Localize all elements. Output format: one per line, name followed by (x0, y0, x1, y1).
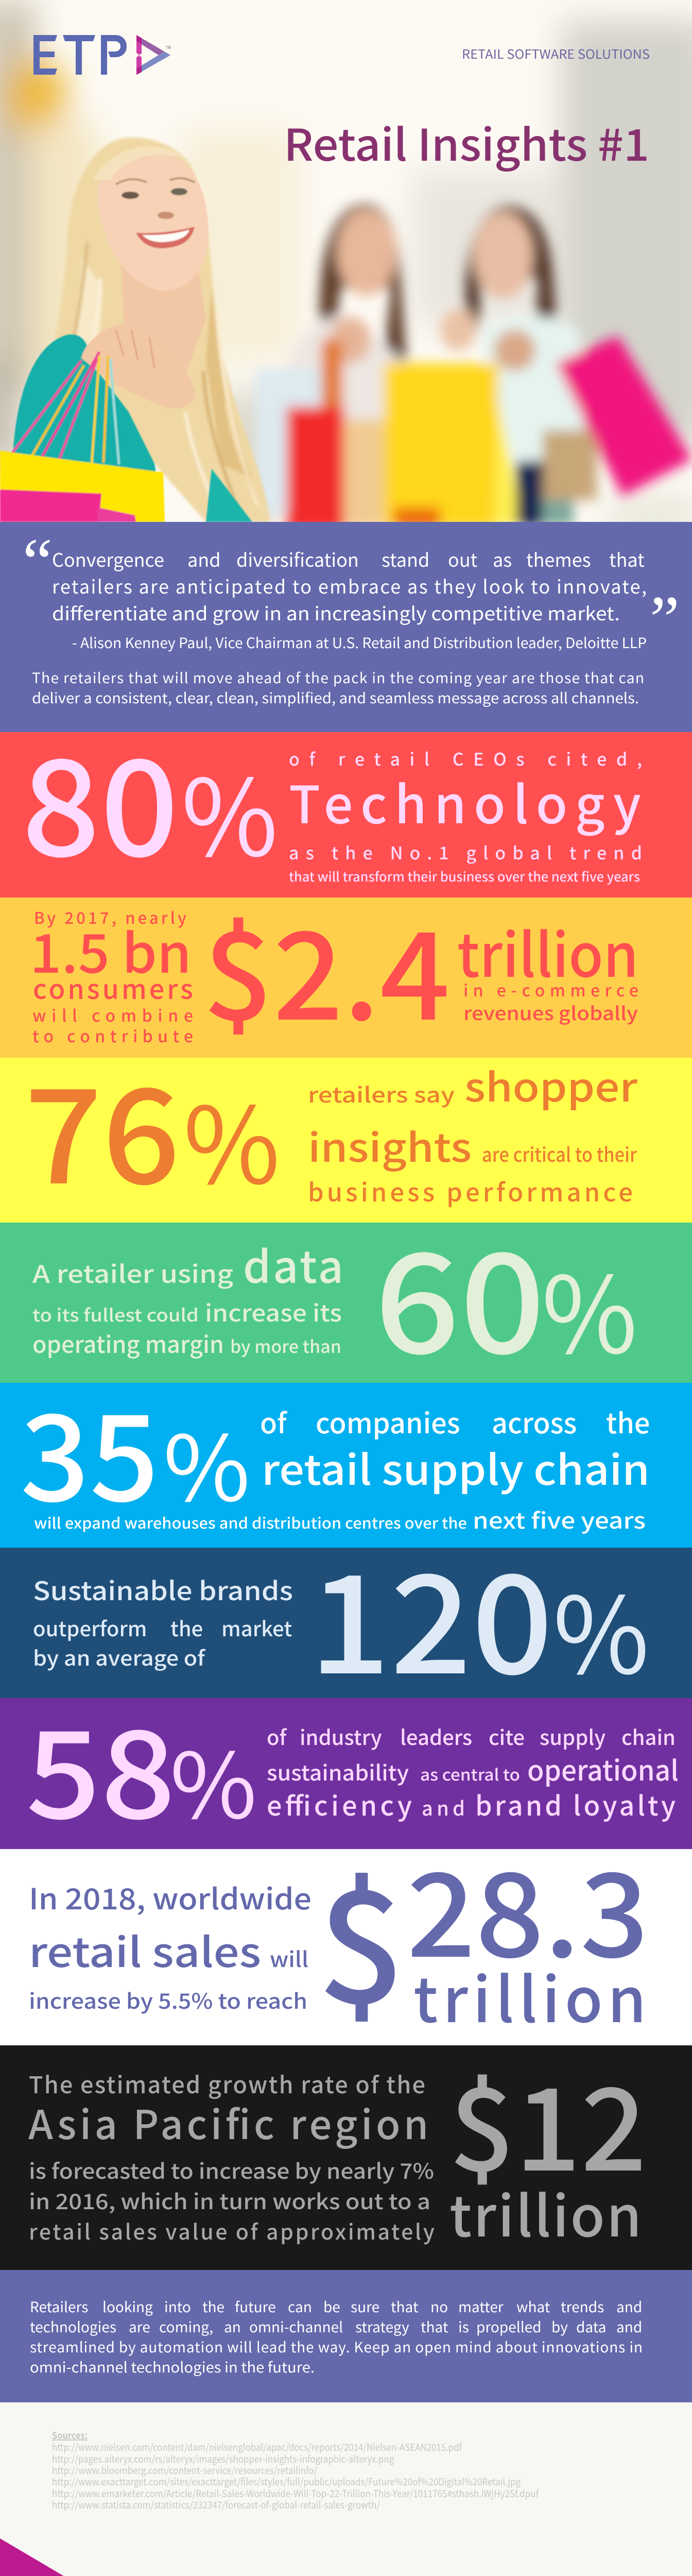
text lines: companies (316, 1401, 460, 1442)
panel: conclusion: propelled (476, 2316, 542, 2337)
conclusion text: be (323, 2296, 340, 2317)
conclusion text: looking (102, 2296, 153, 2317)
hair strands (64, 242, 265, 522)
percent sign: % (542, 1231, 637, 1384)
panel: $2.4 trillion: to contribute (32, 1024, 193, 1047)
sources: http://pages.alteryx.com/rs/alteryx/images/shopper-insights-infographic-alteryx.png (52, 2452, 394, 2466)
panel: 120% sustainable brands: outperform (33, 1613, 147, 1642)
panel: 58% sustainability: brand loyalty (475, 1785, 676, 1823)
text lines: leaders (400, 1721, 472, 1751)
percent sign: % (183, 1061, 280, 1214)
face (97, 152, 209, 291)
quote text: that (609, 546, 645, 572)
panel: 76% shopper insights: shopper (464, 1056, 638, 1113)
neck (122, 266, 206, 371)
hero photo: shoppers with bags (0, 0, 692, 536)
text lines: across (492, 1401, 577, 1442)
panel: 58% sustainability: sustainability (267, 1756, 409, 1787)
panel: conclusion: are (129, 2316, 150, 2337)
big number: 28.3 (407, 1822, 649, 1990)
panel: 58% sustainability: operational (527, 1748, 679, 1789)
panel: conclusion: omni-channel technologies in the future. (30, 2357, 315, 2377)
big number: 58 (26, 1677, 176, 1853)
teal top (10, 334, 165, 522)
panel: $12 trillion: retail sales value of approximately (29, 2215, 435, 2246)
panel: 80% technology: Technology (289, 764, 641, 838)
opening quote mark: “ (23, 525, 53, 599)
panel: conclusion: and (616, 2316, 642, 2337)
panel: conclusion: technologies (30, 2316, 116, 2337)
panel: $28.3 trillion: retail sales (29, 1920, 261, 1979)
eyes (122, 192, 139, 199)
big number: $2.4 (203, 878, 450, 1055)
panel: 58% sustainability: efficiency (267, 1785, 412, 1823)
panel: 58% sustainability: and (422, 1793, 465, 1821)
conclusion text: can (288, 2296, 312, 2317)
text lines: the (606, 1401, 650, 1442)
trillion: trillion (449, 2172, 642, 2253)
panel: conclusion: coming, (159, 2316, 213, 2337)
back women (319, 205, 407, 361)
sources: http://www.emarketer.com/Article/Retail-Sales-Worldwide-Will-Top-22-Trillion-This-Year/1011765#sthash.iWjHy2Sf.dpuf (52, 2486, 539, 2500)
quote text: out (448, 546, 478, 572)
panel: 60% data (0, 1193, 692, 1393)
conclusion text: what (516, 2296, 550, 2317)
panel: 35% supply chain: will expand warehouses and distribution centres over the (34, 1512, 467, 1533)
quote text: and (187, 546, 221, 572)
text lines: of (267, 1721, 287, 1751)
source links: http://www.nielsen.com/content/dam/nielsenglobal/apac/docs/reports/2014/Nielsen-ASEAN2015.pdf (52, 2440, 462, 2454)
panel: $2.4 trillion: 1.5 bn (30, 910, 192, 988)
panel: conclusion: streamlined by automation will lead the way. Keep an open mind about innovations in (30, 2336, 643, 2357)
panel: 80% technology: as the No.1 global trend (289, 839, 642, 865)
text lines: Sustainable brands (33, 1571, 293, 1608)
conclusion text: that (391, 2296, 419, 2317)
panel: 120% sustainable brands: market (221, 1613, 292, 1642)
sources: http://www.statista.com/statistics/232347/forecast-of-global-retail-sales-growth/ (52, 2498, 380, 2512)
logo triangle (136, 35, 170, 75)
panel: conclusion: by (551, 2316, 568, 2337)
panel: 60% data: by more than (230, 1333, 341, 1358)
panel: conclusion: strategy (355, 2316, 409, 2337)
title: Retail Insights #1 (284, 110, 649, 174)
bag handles (0, 351, 122, 470)
paragraph: The retailers that will move ahead of the pack in the coming year are those that can (32, 667, 644, 688)
conclusion text: sure (351, 2296, 379, 2317)
logo letters (33, 35, 127, 75)
attribution: - Alison Kenney Paul, Vice Chairman at U.S. Retail and Distribution leader, Deloitte LLP (72, 632, 647, 653)
text lines: The estimated growth rate of the (29, 2066, 425, 2100)
right text: trillion (457, 908, 638, 994)
conclusion text: Retailers (30, 2296, 88, 2317)
text lines: A retailer using (32, 1255, 233, 1290)
panel: $2.4 trillion (0, 878, 692, 1058)
hands (330, 317, 371, 363)
panel: 35% supply chain (0, 1362, 692, 1548)
panel: 76% shopper insights: business performance (308, 1173, 633, 1209)
panel: quote: deliver a consistent, clear, clean, simplified, and seamless message across all channels. (32, 687, 639, 708)
text lines: In 2018, worldwide (29, 1876, 312, 1918)
text lines: of retail CEOs cited, (289, 745, 642, 771)
panel: conclusion: omni-channel (249, 2316, 343, 2337)
panel: 76% shopper insights (0, 1031, 692, 1223)
text lines: cite (489, 1721, 525, 1751)
panel: conclusion: that (421, 2316, 448, 2337)
panel: 60% data: to its fullest could (32, 1301, 199, 1327)
panel: 60% data: increase its (205, 1295, 342, 1328)
big number: 120 (309, 1516, 553, 1713)
yellow bag (0, 451, 165, 522)
blonde hair (53, 138, 270, 522)
quote text: diversification (236, 546, 359, 572)
icon: magenta arrow (0, 2538, 154, 2576)
sources: http://www.exacttarget.com/sites/exacttarget/files/styles/full/public/uploads/Future%20of%20Digital%20Retail.jpg (52, 2475, 521, 2488)
panel: $28.3 trillion: increase by 5.5% to reach (29, 1984, 307, 2015)
closing quote mark: ” (650, 583, 680, 657)
text lines: of (260, 1401, 288, 1442)
conclusion text: no (430, 2296, 448, 2317)
panel: 60% data: operating margin (32, 1326, 224, 1360)
big number: 60 (374, 1193, 545, 1393)
dollar sign: $ (317, 1824, 405, 2047)
panel: conclusion (0, 2270, 692, 2402)
percent sign: % (163, 1397, 250, 1527)
fingers (116, 330, 154, 368)
text lines: industry (300, 1721, 382, 1751)
sources (52, 2428, 539, 2512)
quote text: themes (526, 546, 591, 572)
hand holding bags (81, 324, 196, 408)
percent sign: % (553, 1551, 649, 1704)
panel: 58% sustainability (0, 1677, 692, 1853)
panel: quote: retailers are anticipated to embrace as they look to innovate, (52, 572, 647, 599)
panel: conclusion: data (576, 2316, 606, 2337)
panel: 60% data: data (243, 1231, 343, 1296)
quote text: stand (382, 546, 429, 572)
percent sign: % (181, 734, 278, 887)
percent sign: % (170, 1714, 257, 1844)
big number: 80 (22, 702, 179, 894)
conclusion text: the (202, 2296, 224, 2317)
panel: $12 trillion: in 2016, which in turn works out to a (29, 2184, 430, 2215)
panel: conclusion: an (224, 2316, 241, 2337)
panel: quote: differentiate and grow in an increasingly competitive market. (52, 599, 620, 626)
big number: 76 (24, 1031, 180, 1222)
pink bag (0, 489, 101, 522)
panel: $12 trillion: Asia Pacific region (28, 2094, 428, 2151)
panel: 120% sustainable brands: by an average of (33, 1642, 206, 1672)
sources heading: Sources: (52, 2428, 88, 2442)
ETP logo (33, 35, 171, 75)
panel: $2.4 trillion: revenues globally (463, 999, 638, 1026)
panel: $2.4 trillion: in e-commerce (463, 978, 638, 1002)
text lines: supply (540, 1721, 605, 1751)
panel: 80% technology: that will transform their business over the next five years (289, 867, 640, 886)
sources: http://www.bloomberg.com/content-service/resources/retailinfo/ (52, 2463, 317, 2477)
panel: conclusion: is (458, 2316, 469, 2337)
big number: $12 (449, 2038, 647, 2204)
panel: $28.3 trillion: will (270, 1942, 308, 1973)
trademark: TM (166, 45, 171, 50)
panel: 120% sustainable brands: the (170, 1613, 203, 1642)
panel: 58% sustainability: as central to (420, 1762, 520, 1785)
conclusion text: and (616, 2296, 642, 2317)
nose (158, 212, 174, 219)
tagline: RETAIL SOFTWARE SOLUTIONS (462, 45, 650, 63)
panel: 76% shopper insights: are critical to their (482, 1139, 637, 1167)
panel: $28.3 trillion (0, 1822, 692, 2047)
conclusion text: trends (561, 2296, 604, 2317)
conclusion text: future (235, 2296, 276, 2317)
quote text: Convergence (52, 546, 164, 572)
panel: $2.4 trillion: will combine (32, 1003, 193, 1027)
panel: 120% sustainable brands (0, 1516, 692, 1713)
panel: 76% shopper insights: insights (308, 1116, 472, 1173)
conclusion text: matter (458, 2296, 504, 2317)
text lines: chain (621, 1721, 676, 1751)
trillion: trillion (413, 1951, 646, 2040)
panel: $12 trillion: is forecasted to increase by nearly 7% (29, 2154, 434, 2185)
quote text: as (493, 546, 512, 572)
panel: quote (0, 522, 692, 732)
left text: By 2017, nearly (34, 905, 186, 928)
mouth (136, 227, 195, 248)
bags (256, 369, 323, 513)
panel: $12 trillion (0, 2038, 692, 2270)
panel: 35% supply chain: next five years (473, 1503, 646, 1535)
panel: $2.4 trillion: consumers (33, 968, 193, 1007)
panel: 80% technology (0, 702, 692, 897)
conclusion text: into (164, 2296, 191, 2317)
big number: 35 (20, 1362, 159, 1535)
panel: 35% supply chain: retail supply chain (262, 1437, 650, 1497)
text lines: retailers say (308, 1078, 455, 1109)
